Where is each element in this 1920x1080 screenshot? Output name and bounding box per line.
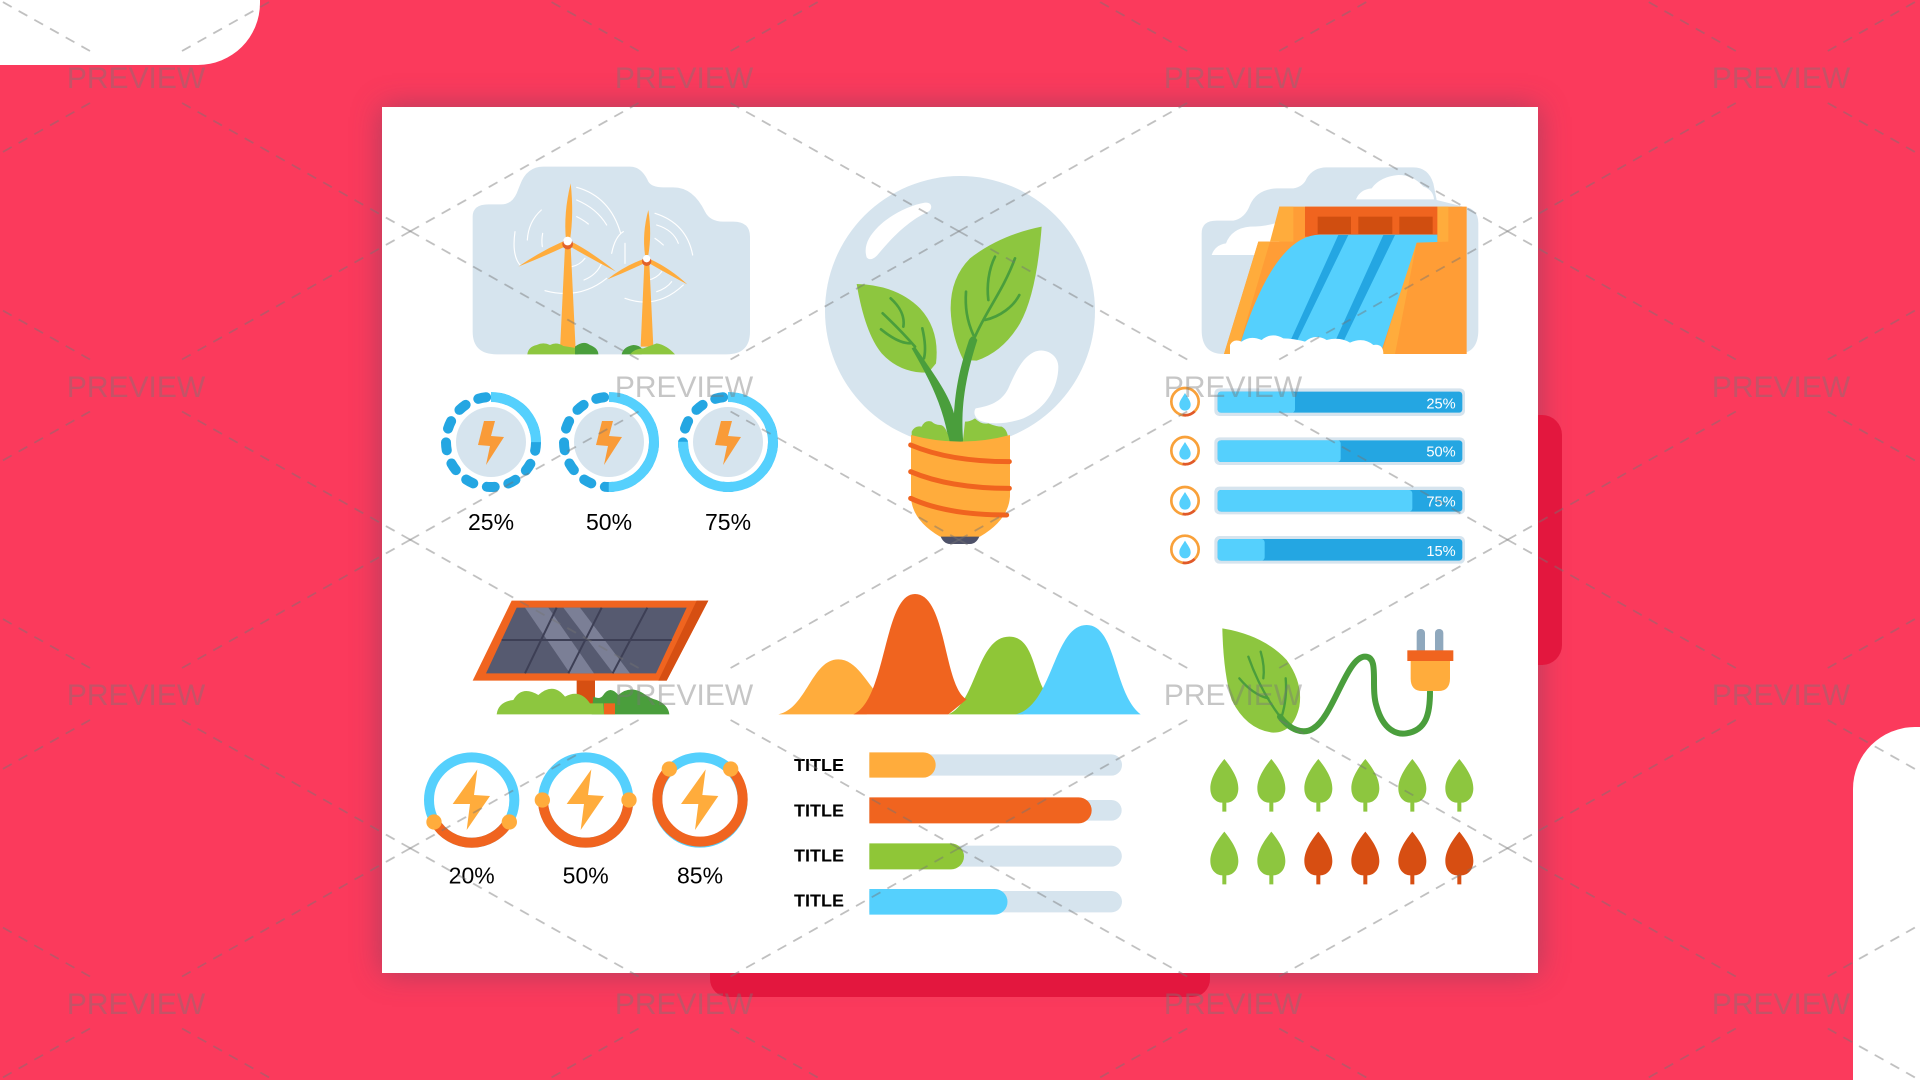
gauge 25%: 25% (468, 509, 514, 535)
illustration: hydro dam (1202, 167, 1478, 354)
bar row 4: TITLE (794, 891, 844, 911)
water bar 75% (1171, 487, 1465, 514)
bar row 2: TITLE (794, 800, 844, 820)
bar row 1 (794, 752, 1122, 778)
watermark text: PREVIEW (1712, 679, 1851, 712)
gauge 85% (657, 757, 743, 888)
illustration: plant in light bulb (825, 176, 1095, 544)
watermark text: PREVIEW (615, 62, 754, 95)
watermark text: PREVIEW (1164, 679, 1303, 712)
water level bars (1171, 388, 1465, 564)
bar row 2 (794, 797, 1122, 823)
watermark text: PREVIEW (1712, 371, 1851, 404)
bar row 1: TITLE (794, 755, 844, 775)
illustration: solar panel (473, 601, 708, 714)
water bar 50%: 50% (1426, 445, 1456, 461)
watermark text: PREVIEW (67, 371, 206, 404)
background corner: bottom right (1853, 727, 1920, 1080)
gauge 25% (445, 396, 537, 535)
watermark text: PREVIEW (67, 679, 206, 712)
water bar 25% (1171, 388, 1465, 416)
watermark text: PREVIEW (615, 679, 754, 712)
gauges: blue and orange rings (426, 757, 743, 888)
side tab (1500, 415, 1562, 665)
chart: title bars (794, 752, 1122, 915)
background corner: top left (0, 0, 260, 65)
gauge 50% (563, 396, 655, 535)
gauge 50%: 50% (586, 509, 632, 535)
leaf rating grid (1210, 759, 1473, 884)
gauge 20%: 20% (449, 862, 495, 888)
panel: main white sheet (382, 106, 1538, 973)
gauge 50% (535, 757, 637, 888)
gauges: dashed blue rings (445, 396, 774, 535)
water bar 15% (1171, 536, 1465, 564)
water bar 25%: 25% (1426, 396, 1456, 412)
gauge 75%: 75% (705, 509, 751, 535)
watermark text: PREVIEW (615, 988, 754, 1021)
bar row 4 (794, 889, 1122, 915)
gauge 20% (426, 757, 517, 888)
gauge 75% (682, 396, 774, 535)
panel shadow (382, 106, 1538, 973)
watermark text: PREVIEW (1712, 988, 1851, 1021)
bar row 3 (794, 843, 1122, 869)
watermark text: PREVIEW (67, 62, 206, 95)
water bar 75%: 75% (1426, 495, 1456, 511)
watermark text: PREVIEW (1712, 62, 1851, 95)
illustration: leaf with plug (1222, 628, 1453, 734)
watermark text: PREVIEW (1164, 62, 1303, 95)
bar row 3: TITLE (794, 846, 844, 866)
watermark text: PREVIEW (67, 988, 206, 1021)
watermark text: PREVIEW (1164, 371, 1303, 404)
gauge 50%: 50% (563, 862, 609, 888)
watermark text: PREVIEW (1164, 988, 1303, 1021)
chart: overlapping hills (778, 594, 1141, 714)
water bar 15%: 15% (1426, 544, 1456, 560)
water bar 50% (1171, 437, 1465, 465)
bottom tab (710, 930, 1210, 997)
illustration: wind turbines (473, 167, 750, 354)
watermark text: PREVIEW (615, 371, 754, 404)
gauge 85%: 85% (677, 862, 723, 888)
